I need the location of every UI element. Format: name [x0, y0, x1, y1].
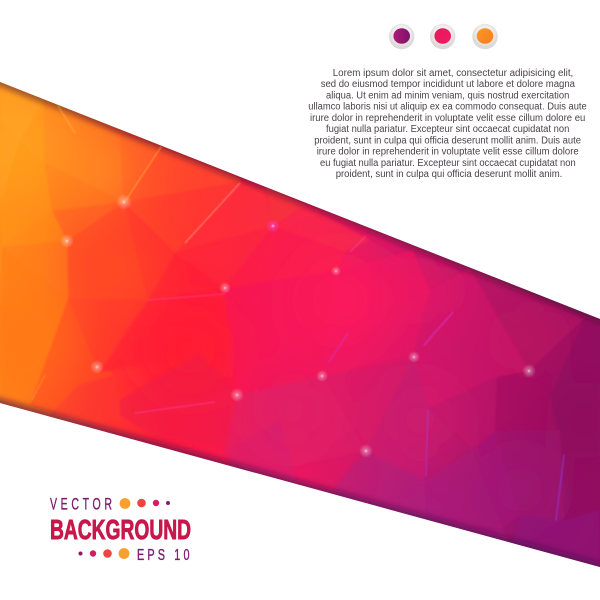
lorem ipsum text block: ullamco laboris nisi ut aliquip ex ea commodo consequat. Duis aute [308, 102, 587, 113]
lorem ipsum text block: Lorem ipsum dolor sit amet, consectetur adipisicing elit, [333, 68, 573, 79]
lorem ipsum text block: irure dolor in reprehenderit in voluptate velit esse cillum dolore [317, 147, 579, 158]
lorem ipsum text block: irure dolor in reprehenderit in voluptate velit esse cillum dolore eu [310, 113, 585, 124]
lorem ipsum text block: eu fugiat nulla pariatur. Excepteur sint occaecat cupidatat non [320, 158, 576, 169]
lorem ipsum text block: aliqua. Ut enim ad minim veniam, quis nostrud exercitation [326, 90, 569, 101]
button: orange [472, 24, 498, 49]
heading: BACKGROUND: BACKGROUND [50, 514, 191, 545]
lorem ipsum text block: proident, sunt in culpa qui officia deserunt mollit anim. [336, 169, 562, 180]
button: pink [430, 24, 455, 49]
sparkles [60, 194, 536, 458]
lorem ipsum text block [308, 68, 587, 180]
lorem ipsum text block: proident, sunt in culpa qui officia deserunt mollit anim. Duis aute [314, 135, 581, 146]
light streaks [32, 106, 564, 520]
colour glow field [0, 105, 600, 540]
heading: VECTOR: VECTOR [50, 494, 116, 513]
button: purple [389, 24, 414, 49]
colour buttons [389, 24, 498, 49]
dots: lower row [78, 548, 129, 559]
label: EPS 10: EPS 10 [137, 546, 193, 563]
logo: vector background eps 10 [50, 494, 193, 563]
lorem ipsum text block: fugiat nulla pariatur. Excepteur sint occaecat cupidatat non [326, 124, 569, 135]
lorem ipsum text block: sed do eiusmod tempor incididunt ut labore et dolore magna [321, 79, 575, 90]
dots: upper row [120, 498, 170, 509]
